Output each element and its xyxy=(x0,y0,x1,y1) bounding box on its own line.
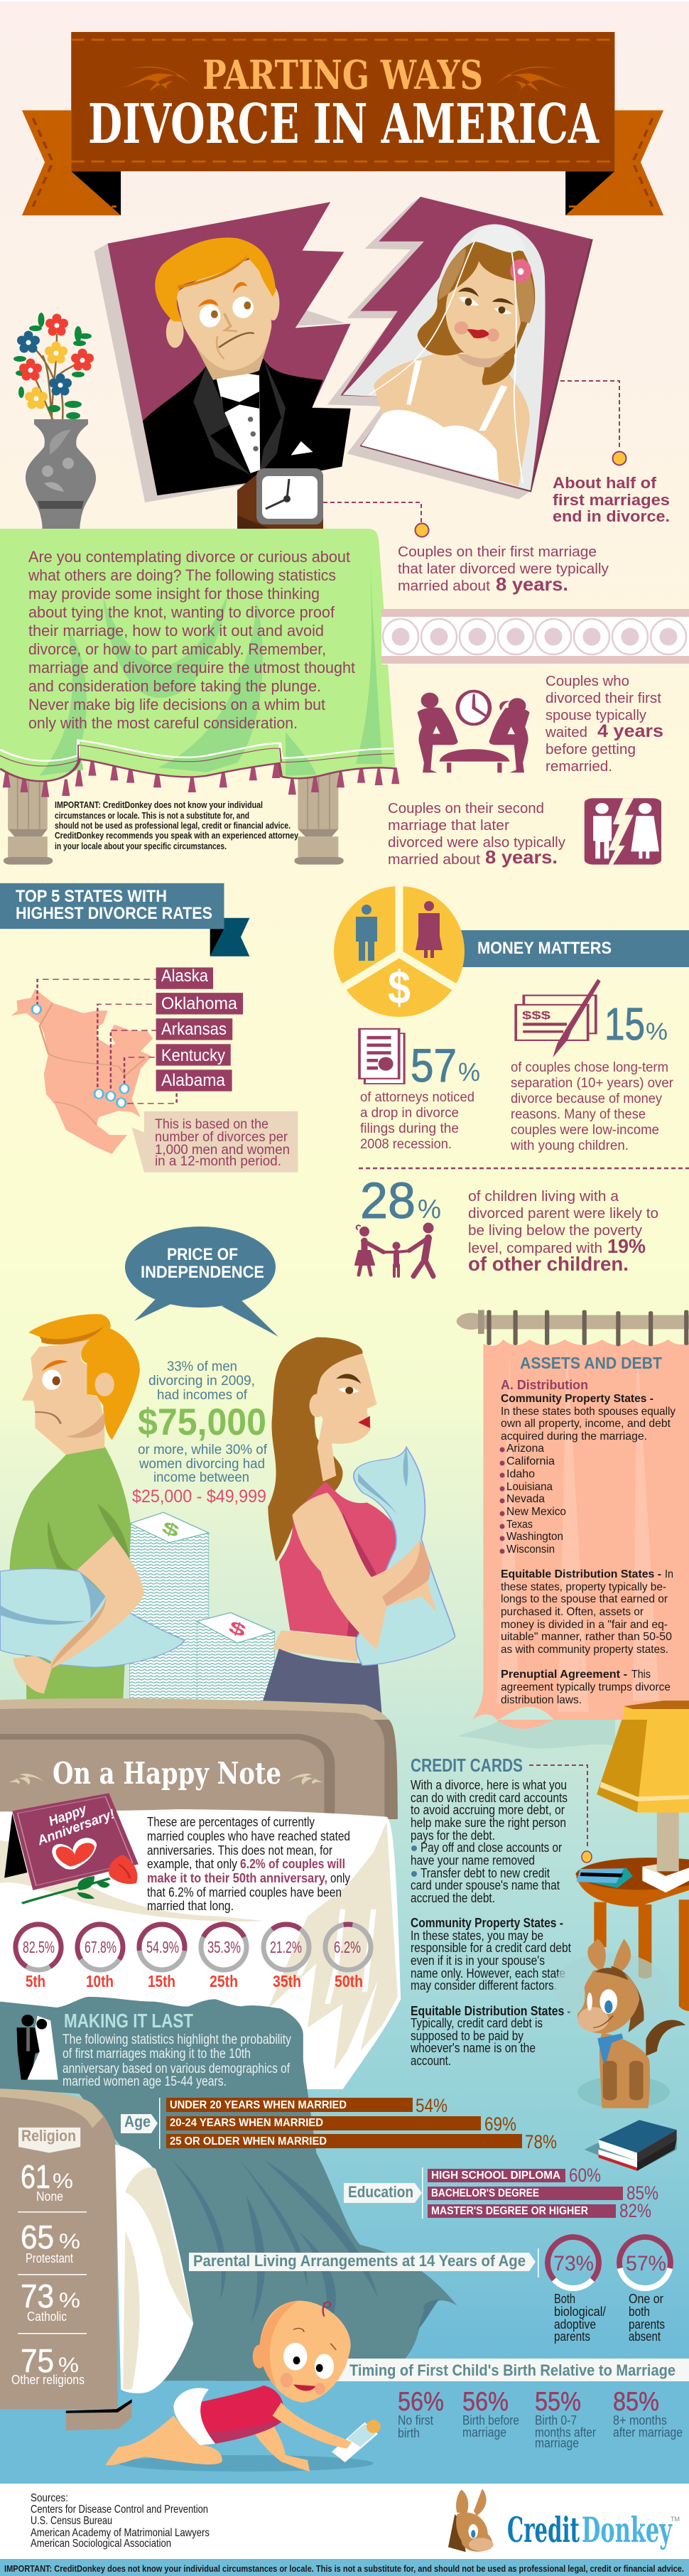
panel: curtain with assets and debt: these states, property typically be- xyxy=(501,1581,666,1593)
illustration: lamp on side table xyxy=(575,1701,689,2011)
panel: curtain with assets and debt: longs to the spouse that earned or xyxy=(501,1593,668,1605)
disclaimer text: circumstances or locale. This is not a substitute for, and xyxy=(55,810,249,821)
illustration: crawling baby xyxy=(105,2301,381,2472)
text: credit cards: Pay off and close accounts or xyxy=(421,1841,562,1855)
illustration: money stacks: $ xyxy=(159,1518,183,1542)
chart: parental living arrangements xyxy=(189,2226,676,2344)
panel: religion: % xyxy=(59,2230,80,2253)
panel: bed headboard and sheet: On a Happy Note xyxy=(53,1756,281,1791)
stat: 28 percent children: divorced parent were likely to xyxy=(468,1206,658,1222)
chart: parental living arrangements: Parental Living Arrangements at 14 Years of Age xyxy=(193,2252,526,2270)
stat: 15 percent long-term separation: with young children. xyxy=(510,1138,629,1153)
text: price of independence stats: or more, while 30% of xyxy=(138,1443,268,1457)
text: price of independence stats: $25,000 - $49,999 xyxy=(132,1487,266,1507)
vase with flowers xyxy=(13,313,96,535)
chart: parental living arrangements: biological/ xyxy=(554,2305,606,2319)
text: anniversary explanation: anniversaries. This does not mean, for xyxy=(147,1843,332,1858)
torn portrait: bride xyxy=(327,197,592,500)
map: North America with state pins: number of divorces per xyxy=(155,1130,288,1145)
panel: curtain with assets and debt: agreement typically trumps divorce xyxy=(501,1681,671,1693)
illustration: money stacks: $ xyxy=(226,1617,249,1642)
panel: curtain with assets and debt: Prenuptial Agreement - xyxy=(501,1669,627,1681)
illustration: donkey mascot xyxy=(554,1939,685,2108)
panel: curtain with assets and debt: New Mexico xyxy=(506,1506,566,1518)
chart: anniversary rings: 67.8% xyxy=(85,1938,116,1956)
panel: religion: Catholic xyxy=(27,2310,67,2324)
icon: clock xyxy=(237,468,323,529)
icon: anniversary card with rose: Anniversary! xyxy=(35,1807,117,1849)
panel: curtain with assets and debt: Community Property States - xyxy=(501,1393,653,1405)
text: credit cards: account. xyxy=(411,2054,451,2068)
panel: blanket and making it last: married women age 15-44 years. xyxy=(63,2074,227,2089)
chart: anniversary rings: 6.2% xyxy=(334,1938,361,1956)
panel: curtain with assets and debt: distribution laws. xyxy=(501,1694,582,1706)
intro paragraph: and consideration before taking the plunge. xyxy=(28,677,321,695)
stat: 28 percent children: level, compared with xyxy=(468,1241,602,1256)
panel: blanket and making it last: anniversary based on various demographics of xyxy=(63,2062,291,2076)
stat: 15 percent long-term separation: separation (10+ years) over xyxy=(511,1076,674,1091)
chart: parental living arrangements: both xyxy=(629,2305,650,2319)
chart: anniversary rings xyxy=(7,1915,375,1990)
illustration: money stacks xyxy=(129,1512,275,1701)
text: wait before remarrying: waited xyxy=(545,725,587,740)
intro paragraph: divorce, or how to part amicably. Remember, xyxy=(28,640,326,658)
text: credit cards: card under spouse's name that xyxy=(411,1878,560,1892)
disclaimer text xyxy=(55,799,299,851)
panel: curtain with assets and debt: Wisconsin xyxy=(506,1543,555,1556)
intro paragraph: marriage and divorce require the utmost thought xyxy=(28,659,355,677)
text: price of independence stats: had incomes of xyxy=(157,1388,248,1403)
text: credit cards: Transfer debt to new credit xyxy=(421,1866,550,1880)
stat: 15 percent long-term separation: $$$ xyxy=(522,1010,550,1022)
text: anniversary explanation: These are percentages of currently xyxy=(147,1815,315,1829)
chart: parental living arrangements: Both xyxy=(554,2292,575,2306)
callout: half of first marriages xyxy=(553,381,670,525)
map: North America with state pins xyxy=(11,966,298,1173)
intro paragraph: about tying the knot, wanting to divorce proof xyxy=(28,603,335,621)
text: second marriage duration: divorced were also typically xyxy=(388,835,565,851)
timing of first birth stats: marriage xyxy=(462,2425,506,2440)
panel: curtain with assets and debt: money is divided in a "fair and eq- xyxy=(501,1619,668,1631)
panel: religion: % xyxy=(58,2354,79,2377)
disclaimer text: CreditDonkey recommends you speak with an experienced attorney xyxy=(55,830,299,841)
callout: half of first marriages: first marriages xyxy=(553,491,670,509)
torn portrait: groom xyxy=(94,202,351,502)
footer: sources and logo: American Sociological Association xyxy=(31,2538,171,2550)
callout: first marriage duration: 8 years. xyxy=(496,573,568,595)
timing of first birth stats: marriage xyxy=(535,2436,579,2450)
footer disclaimer bar xyxy=(0,2559,689,2576)
timing of first birth stats xyxy=(330,2359,689,2450)
stat: 15 percent long-term separation: % xyxy=(646,1018,668,1045)
text: wait before remarrying xyxy=(545,674,663,775)
callout: first marriage duration: Couples on their first marriage xyxy=(398,544,597,560)
text: second marriage duration: married about xyxy=(388,852,480,868)
text: credit cards: even if it is in your spouse's xyxy=(411,1953,545,1968)
disclaimer text: in your locale about your specific circumstances. xyxy=(55,841,227,851)
stat: 57 percent attorneys: of attorneys noticed xyxy=(360,1090,474,1105)
bar chart: age xyxy=(121,2095,557,2152)
chart: parental living arrangements: parents xyxy=(554,2329,590,2344)
icon: couple waiting with clock xyxy=(418,690,529,772)
callout: half of first marriages: About half of xyxy=(553,474,657,492)
ornamental band xyxy=(381,609,689,664)
footer: sources and logo: TM xyxy=(671,2516,680,2523)
bar chart: age: 20-24 YEARS WHEN MARRIED xyxy=(170,2117,323,2129)
panel: curtain with assets and debt: own all property, income, and debt xyxy=(501,1418,671,1430)
text: anniversary explanation: make it to their 50th anniversary, xyxy=(147,1871,327,1885)
text: credit cards: help make sure the right person xyxy=(411,1816,566,1830)
intro paragraph: their marriage, how to work it out and avoid xyxy=(28,622,324,640)
panel: curtain with assets and debt: A. Distribution xyxy=(501,1378,588,1392)
text: anniversary explanation: married couples who have reached stated xyxy=(147,1829,350,1843)
map: North America with state pins: Alaska xyxy=(161,966,209,986)
speech bubble: price of independence xyxy=(125,1227,278,1337)
panel: religion xyxy=(0,2089,193,2430)
text: anniversary explanation: only xyxy=(330,1871,350,1885)
text: anniversary explanation xyxy=(147,1815,350,1913)
bar chart: age: 25 OR OLDER WHEN MARRIED xyxy=(170,2135,327,2147)
chart: anniversary rings: 50th xyxy=(335,1972,363,1990)
chart: parental living arrangements: adoptive xyxy=(554,2317,596,2332)
stat: 15 percent long-term separation: divorce because of money xyxy=(511,1092,662,1106)
title banner: PARTING WAYS xyxy=(202,52,483,99)
text: second marriage duration: Couples on their second xyxy=(388,801,544,817)
stat: 15 percent long-term separation: 15 xyxy=(604,998,645,1050)
intro paragraph: only with the most careful consideration. xyxy=(28,714,298,732)
panel: curtain with assets and debt: purchased it. Often, assets or xyxy=(501,1606,644,1618)
panel: religion: Religion xyxy=(21,2127,76,2145)
bar chart: age: UNDER 20 YEARS WHEN MARRIED xyxy=(170,2099,347,2111)
text: price of independence stats xyxy=(132,1359,268,1507)
stat: 28 percent children: % xyxy=(418,1195,441,1224)
text: second marriage duration: marriage that later xyxy=(388,818,509,834)
panel: curtain with assets and debt: Idaho xyxy=(506,1468,535,1480)
chart: anniversary rings: 54.9% xyxy=(146,1938,179,1956)
heading banner: money matters: MONEY MATTERS xyxy=(477,939,612,958)
heading banner: top 5 states xyxy=(0,883,249,956)
panel: curtain with assets and debt: Washington xyxy=(506,1531,563,1543)
heading banner: money matters xyxy=(447,930,689,967)
stat: 28 percent children: 19% xyxy=(607,1235,646,1257)
timing of first birth stats: Birth 0-7 xyxy=(535,2413,577,2427)
panel: curtain with assets and debt: In xyxy=(665,1568,673,1580)
text: credit cards: With a divorce, here is what you xyxy=(411,1778,567,1792)
stat: 57 percent attorneys: a drop in divorce xyxy=(360,1106,459,1121)
panel: curtain with assets and debt: In these states both spouses equally xyxy=(501,1406,676,1418)
panel: religion: 65 xyxy=(21,2219,54,2256)
text: credit cards: can do with credit card accounts xyxy=(411,1791,568,1805)
text: second marriage duration xyxy=(388,801,565,868)
panel: blanket and making it last: MAKING IT LAST xyxy=(64,2010,193,2032)
stat: 57 percent attorneys: filings during the xyxy=(360,1121,459,1136)
text: anniversary explanation: example, that only xyxy=(147,1857,237,1871)
panel: religion: Other religions xyxy=(11,2373,85,2387)
heading banner: top 5 states: HIGHEST DIVORCE RATES xyxy=(16,904,212,923)
stat: 57 percent attorneys: 2008 recession. xyxy=(360,1137,452,1152)
chart: anniversary rings: 10th xyxy=(86,1972,114,1990)
timing of first birth stats: 56% xyxy=(462,2387,509,2416)
text: price of independence stats: $75,000 xyxy=(138,1401,266,1443)
chart: anniversary rings: 15th xyxy=(148,1972,175,1990)
bar chart: age: 78% xyxy=(525,2131,557,2152)
footer: sources and logo xyxy=(0,2484,689,2559)
text: credit cards: to avoid accruing more debt, or xyxy=(411,1803,565,1817)
footer: sources and logo: U.S. Census Bureau xyxy=(31,2515,112,2527)
text: price of independence stats: women divorcing had xyxy=(139,1457,265,1472)
chart: parental living arrangements: One or xyxy=(629,2292,663,2306)
chart: parental living arrangements: 73% xyxy=(553,2252,594,2275)
icon: family xyxy=(355,1222,433,1276)
stat: 57 percent attorneys: 57 xyxy=(411,1039,457,1092)
bar chart: age: Age xyxy=(124,2113,151,2130)
panel: curtain with assets and debt: acquired during the marriage. xyxy=(501,1430,647,1443)
stat: 15 percent long-term separation: of couples chose long-term xyxy=(511,1060,668,1075)
panel: religion: % xyxy=(53,2170,73,2193)
bar chart: education: HIGH SCHOOL DIPLOMA xyxy=(431,2170,560,2182)
stat: 28 percent children: be living below the poverty xyxy=(468,1223,642,1239)
stat: 15 percent long-term separation: reasons. Many of these xyxy=(511,1107,646,1122)
stat: 15 percent long-term separation xyxy=(510,979,674,1153)
panel: curtain with assets and debt: as with community property states. xyxy=(501,1644,668,1656)
timing of first birth stats: 8+ months xyxy=(613,2413,667,2427)
disclaimer text: IMPORTANT: CreditDonkey does not know your individual xyxy=(55,799,263,810)
stat: 57 percent attorneys xyxy=(359,1029,480,1152)
text: wait before remarrying: Couples who xyxy=(546,674,629,689)
icon: anniversary card with rose: Happy xyxy=(47,1801,89,1829)
map: North America with state pins: in a 12-month period. xyxy=(155,1154,281,1169)
title banner xyxy=(22,32,663,215)
chart: anniversary rings: 25th xyxy=(210,1972,238,1990)
disclaimer text: should not be used as professional legal, credit or financial advice. xyxy=(55,820,291,831)
panel: curtain with assets and debt: Equitable Distribution States - xyxy=(501,1568,661,1580)
icon: pie with couple and dollar: $ xyxy=(388,961,411,1013)
chart: anniversary rings: 82.5% xyxy=(23,1938,55,1956)
text: second marriage duration: 8 years. xyxy=(485,846,558,868)
text: credit cards: name only. However, each state xyxy=(411,1966,565,1980)
footer: sources and logo: Sources: xyxy=(31,2492,68,2504)
map: North America with state pins: 1,000 men and women xyxy=(155,1143,290,1158)
callout: first marriage duration: that later divorced were typically xyxy=(398,561,609,577)
intro paragraph: what others are doing? The following statistics xyxy=(28,566,336,584)
timing of first birth stats: birth xyxy=(398,2426,420,2440)
panel: blanket and making it last: The following statistics highlight the probability xyxy=(63,2032,291,2047)
panel: curtain with assets and debt: Louisiana xyxy=(506,1481,553,1493)
stat: 28 percent children: 28 xyxy=(360,1173,416,1229)
stat: 28 percent children: of other children. xyxy=(468,1253,629,1275)
stat: 28 percent children xyxy=(355,1173,658,1276)
panel: curtain with assets and debt: uitable" manner, rather than 50-50 xyxy=(501,1631,672,1643)
panel: religion: 61 xyxy=(21,2158,50,2195)
bar chart: age: 54% xyxy=(416,2095,447,2116)
bar chart: education xyxy=(344,2165,658,2221)
speech bubble: price of independence: PRICE OF xyxy=(167,1245,238,1264)
map: North America with state pins: Alabama xyxy=(161,1071,226,1090)
panel: green table with intro xyxy=(0,529,399,865)
table legs xyxy=(4,770,344,865)
map: North America with state pins: Kentucky xyxy=(161,1046,225,1065)
intro paragraph: Are you contemplating divorce or curious about xyxy=(28,548,350,566)
panel: curtain with assets and debt: Nevada xyxy=(506,1493,545,1505)
text: credit cards: pays for the debt. xyxy=(411,1828,495,1843)
panel: curtain with assets and debt: This xyxy=(631,1669,651,1681)
text: price of independence stats: income between xyxy=(153,1470,249,1485)
text: price of independence stats: 33% of men xyxy=(167,1359,237,1374)
bar chart: age: 69% xyxy=(484,2113,516,2135)
stat: 15 percent long-term separation: couples were low-income xyxy=(511,1123,659,1138)
icon: pie with couple and dollar xyxy=(331,881,467,1017)
intro paragraph xyxy=(28,548,355,732)
callout: half of first marriages: end in divorce. xyxy=(553,507,670,525)
timing of first birth stats: No first xyxy=(398,2413,433,2427)
panel: religion: Protestant xyxy=(26,2251,73,2265)
icon: books xyxy=(585,2120,677,2171)
chart: anniversary rings: 21.2% xyxy=(270,1938,302,1956)
panel: religion: 73 xyxy=(21,2278,54,2314)
timing of first birth stats: 56% xyxy=(398,2387,444,2416)
text: wait before remarrying: remarried. xyxy=(546,759,612,775)
text: credit cards: CREDIT CARDS xyxy=(411,1755,523,1776)
footer: sources and logo: Centers for Disease Control and Prevention xyxy=(31,2504,208,2516)
bar chart: education: MASTER'S DEGREE OR HIGHER xyxy=(431,2205,588,2217)
text: credit cards: accrued the debt. xyxy=(411,1891,495,1905)
text: credit cards: Equitable Distribution States - xyxy=(411,2004,571,2018)
logo: donkey head xyxy=(448,2489,494,2552)
callout: first marriage duration: married about xyxy=(398,578,490,594)
text: credit cards: may consider different factors. xyxy=(411,1978,557,1993)
text: credit cards: Community Property States - xyxy=(411,1916,563,1930)
timing of first birth stats: 55% xyxy=(535,2387,581,2416)
text: wait before remarrying: spouse typically xyxy=(546,708,646,723)
text: anniversary explanation: 6.2% of couples will xyxy=(240,1857,345,1871)
text: credit cards: In these states, you may be xyxy=(411,1929,543,1943)
timing of first birth stats: Birth before xyxy=(462,2413,519,2427)
text: credit cards: supposed to be paid by xyxy=(411,2029,523,2043)
icon: bride and groom xyxy=(17,2015,58,2080)
icon: anniversary card with rose xyxy=(4,1793,139,1903)
text: wait before remarrying: 4 years xyxy=(597,721,663,741)
panel: curtain with assets and debt: ASSETS AND DEBT xyxy=(520,1354,662,1372)
chart: anniversary rings: 5th xyxy=(26,1972,45,1990)
footer: sources and logo: American Academy of Matrimonial Lawyers xyxy=(31,2527,210,2539)
text: anniversary explanation: that 6.2% of married couples have been xyxy=(147,1885,342,1899)
panel: religion: None xyxy=(36,2189,63,2204)
stat: 28 percent children: of children living with a xyxy=(468,1189,619,1205)
bar chart: education: 82% xyxy=(619,2200,651,2221)
map: North America with state pins: This is based on the xyxy=(155,1117,268,1132)
bar chart: education: BACHELOR'S DEGREE xyxy=(431,2187,539,2199)
text: price of independence stats: divorcing in 2009, xyxy=(148,1374,255,1389)
footer: sources and logo: Credit xyxy=(507,2509,580,2550)
panel: curtain with assets and debt: California xyxy=(506,1455,555,1467)
illustration: woman with pillow xyxy=(257,1337,455,1720)
text: credit cards xyxy=(410,1755,592,2068)
bar chart: education: 60% xyxy=(569,2165,601,2186)
map: North America with state pins: Oklahoma xyxy=(161,994,238,1013)
text: wait before remarrying: divorced their first xyxy=(546,691,661,706)
chart: parental living arrangements: 57% xyxy=(626,2252,666,2275)
chart: parental living arrangements: parents xyxy=(629,2317,665,2332)
icon: split couple xyxy=(585,798,661,865)
timing of first birth stats: months after xyxy=(535,2425,596,2440)
intro paragraph: Never make big life decisions on a whim but xyxy=(28,696,325,713)
intro paragraph: may provide some insight for those thinking xyxy=(28,585,320,603)
bar chart: education: Education xyxy=(348,2183,413,2201)
panel: bed headboard and sheet xyxy=(0,1698,615,2089)
text: credit cards: have your name removed xyxy=(411,1853,535,1868)
panel: curtain with assets and debt xyxy=(457,1310,689,1720)
panel: curtain with assets and debt: Arizona xyxy=(506,1443,544,1455)
text: anniversary explanation: married that long. xyxy=(147,1899,234,1913)
chart: anniversary rings: 35.3% xyxy=(207,1938,241,1956)
text: credit cards: whoever's name is on the xyxy=(410,2041,536,2055)
stat: 57 percent attorneys: % xyxy=(458,1057,480,1087)
panel: curtain with assets and debt: Texas xyxy=(506,1519,533,1531)
map: North America with state pins: Arkansas xyxy=(161,1020,227,1039)
panel: blanket and making it last xyxy=(0,1997,457,2383)
panel: religion: % xyxy=(59,2289,80,2312)
callout: first marriage duration xyxy=(323,502,609,595)
timing of first birth stats: 85% xyxy=(613,2387,659,2416)
panel: blanket and making it last: of first marriages making it to the 10th xyxy=(63,2047,251,2062)
heading banner: top 5 states: TOP 5 STATES WITH xyxy=(16,887,167,906)
text: wait before remarrying: before getting xyxy=(546,742,636,758)
speech bubble: price of independence: INDEPENDENCE xyxy=(141,1263,264,1282)
text: credit cards: Typically, credit card debt is xyxy=(411,2016,543,2030)
chart: anniversary rings: 35th xyxy=(273,1972,301,1990)
illustration: angry man with pillow xyxy=(0,1314,185,1701)
chart: parental living arrangements: absent xyxy=(629,2329,661,2344)
bar chart: education: 85% xyxy=(626,2182,658,2204)
panel: religion: 75 xyxy=(21,2342,54,2379)
text: credit cards: responsible for a credit card debt xyxy=(411,1941,571,1955)
